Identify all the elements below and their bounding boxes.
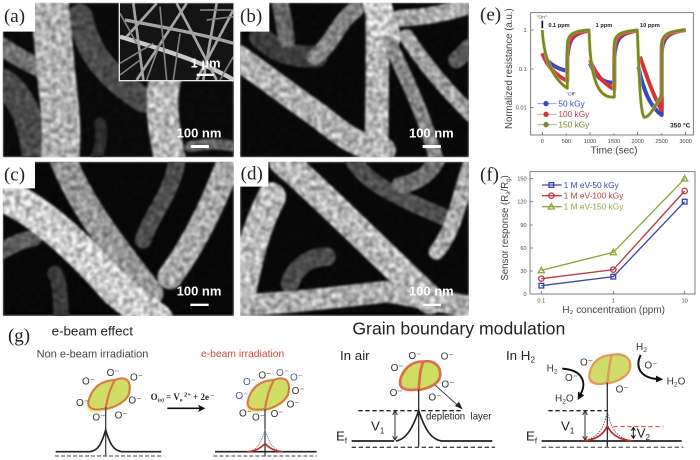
y axis title (e): Normalized resistance (a.u.)	[504, 8, 515, 129]
diagram: in H2: 2	[530, 356, 535, 365]
y axis title (f): Sensor response (R	[500, 195, 511, 281]
diagram: in H2: O	[678, 376, 686, 387]
label (b): (b)	[240, 6, 262, 27]
grain diagram: non irradiated: O⁻	[115, 411, 128, 422]
SEM fibres (b)	[237, 3, 472, 160]
x axis tick labels (e): 3000	[679, 139, 692, 145]
x tick labels (f): 10	[682, 299, 688, 305]
diagram: in air: O⁻	[391, 363, 404, 374]
legend (f): 1 M eV-150 kGy	[564, 201, 624, 211]
diagram: in air: O⁻	[441, 352, 454, 363]
x tick labels (f): 0.1	[537, 299, 545, 305]
x axis title (e): Time (sec)	[591, 145, 637, 156]
heading: grain boundary modulation: Grain boundary modulation	[352, 318, 565, 338]
diagram: in air: depletion layer	[426, 411, 492, 422]
diagram: in air: 1	[380, 426, 385, 435]
legend (e): 150 kGy	[558, 120, 590, 130]
diagram: in H2: H	[555, 394, 562, 405]
diagram: in H2: H	[667, 376, 674, 387]
SEM fibres (d)	[240, 160, 470, 316]
chart (f): sensor response vs H2 concentration	[480, 165, 695, 316]
grain diagram: irradiated: O⁻	[287, 400, 300, 411]
y tick labels (f): 90	[520, 223, 527, 229]
diagram: in H2: H	[547, 364, 554, 375]
y tick labels (f): 60	[520, 246, 527, 252]
grain diagram: irradiated: O⁻	[292, 386, 305, 397]
x axis tick labels (e): 2000	[631, 139, 644, 145]
annotations (e): "On"	[537, 14, 547, 20]
diagram: in H2: O⁻	[565, 373, 578, 384]
y axis title (f): )	[500, 175, 511, 178]
equation and arrow: 2+	[183, 392, 191, 399]
legend (e): 100 kGy	[558, 109, 590, 119]
diagram: in H2: E	[526, 429, 535, 444]
scale label 100 nm (c): 100 nm	[177, 284, 221, 299]
x axis tick labels (e): 1000	[584, 139, 596, 145]
diagram: in air: V	[371, 419, 380, 434]
x axis tick labels (e): 0	[541, 139, 544, 145]
grain diagram: irradiated: O⁻	[235, 391, 248, 402]
diagram: in air: f	[345, 436, 348, 445]
diagram: in H2: 2	[643, 347, 647, 354]
panel (b): SEM image	[237, 3, 472, 160]
label (f): (f)	[480, 165, 499, 186]
grain diagram: irradiated: O⁻	[239, 408, 252, 419]
annotations (e): 0.1 ppm	[548, 23, 570, 29]
grain diagram: non irradiated: O⁻	[92, 412, 105, 423]
y tick labels (f): 150	[517, 177, 527, 183]
y tick labels (f): 30	[520, 269, 527, 275]
equation and arrow: + 2e	[191, 392, 209, 402]
annotations (e): 350 °C	[670, 122, 691, 130]
heading: e-beam effect: e-beam effect	[52, 324, 133, 339]
annotations (e)	[537, 14, 691, 130]
diagram: in air: O⁻	[428, 393, 441, 404]
y axis tick labels (e)	[516, 28, 527, 112]
legend (e): 50 kGy	[558, 99, 586, 109]
annotations (e): 1 ppm	[596, 23, 612, 29]
diagram: in H2: 2	[646, 433, 651, 442]
grain diagram: non irradiated: O⁻	[130, 373, 143, 384]
legend (f): 1 M eV-100 kGy	[564, 190, 624, 200]
legend (f)	[542, 180, 624, 211]
y tick labels (f): 120	[517, 200, 527, 206]
grain diagram: non irradiated: O⁻	[107, 368, 120, 379]
scale label 100 nm (b): 100 nm	[409, 126, 454, 141]
label (g): (g)	[8, 325, 30, 346]
grain diagram: irradiated: O⁻	[258, 371, 271, 382]
grain diagram: non irradiated: O⁻	[128, 395, 141, 406]
scale label 100 nm (b)	[409, 126, 454, 148]
equation and arrow	[151, 392, 215, 412]
diagram: in H2: O⁻	[644, 360, 657, 371]
series lines and markers (f)	[538, 176, 688, 288]
scale label 100 nm (a): 100 nm	[177, 126, 221, 141]
diagram: in H2: 2	[562, 399, 566, 406]
grain diagram: irradiated: O⁻	[290, 373, 303, 384]
chart (e): normalized resistance vs time	[480, 5, 693, 156]
grain diagram: irradiated	[213, 368, 317, 457]
diagram: in air: O⁻	[408, 351, 421, 362]
panel (g): e-beam effect	[8, 324, 317, 457]
label (a): (a)	[4, 6, 25, 27]
diagram: in H2: 1	[570, 426, 575, 435]
x tick labels (f)	[537, 299, 688, 305]
diagram: in air: E	[336, 429, 345, 444]
diagram: in air: In air	[340, 348, 370, 363]
diagram: in air	[336, 348, 495, 447]
inset micrograph	[119, 3, 234, 81]
y axis tick labels (e): 0.1	[519, 67, 527, 73]
grain diagram: non irradiated	[55, 368, 163, 457]
diagram: in H2: 2	[674, 381, 678, 388]
diagram: in H2: O⁻	[580, 358, 593, 369]
legend (e)	[537, 99, 590, 130]
x axis tick labels (e)	[541, 139, 692, 145]
scale label 100 nm (d)	[409, 284, 454, 306]
panel (g): grain boundary modulation	[336, 318, 686, 447]
y axis tick labels (e): 0.01	[516, 106, 527, 112]
label (c): (c)	[4, 165, 25, 186]
grain diagram: irradiated: O⁻	[252, 412, 265, 423]
y tick labels (f): 0	[524, 292, 527, 298]
diagram: in air: O⁻	[441, 380, 454, 391]
annotations (e): 10 ppm	[640, 23, 660, 29]
x axis tick labels (e): 1500	[608, 139, 620, 145]
diagram: in H2: H	[636, 342, 643, 353]
axes (e)	[531, 13, 693, 135]
equation and arrow: = V	[164, 392, 180, 402]
diagram: in H2: V	[637, 425, 646, 440]
diagram: in H2: O⁻	[616, 385, 629, 396]
axes (f)	[530, 172, 695, 294]
label (e): (e)	[480, 5, 501, 26]
y tick labels (f)	[517, 177, 527, 298]
diagram: in H2: V	[561, 419, 570, 434]
x tick labels (f): 1	[612, 299, 615, 305]
panel (c): SEM image	[0, 160, 234, 320]
annotations (e): "Off"	[566, 91, 576, 97]
scale label 1 µm: 1 µm	[191, 56, 221, 71]
panel (a): SEM image with inset	[2, 3, 237, 160]
y axis title (f): g	[506, 178, 512, 182]
grain diagram: non irradiated: O⁻	[76, 398, 89, 409]
grain diagram: irradiated: O⁻	[276, 368, 289, 379]
SEM fibres (c)	[0, 160, 234, 320]
x axis tick labels (e): 2500	[655, 139, 668, 145]
equation and arrow: o	[180, 397, 183, 403]
label (d): (d)	[241, 163, 263, 184]
diagram: in H2: In H	[506, 348, 530, 363]
text: e-beam irradiation: e-beam irradiation	[201, 349, 284, 360]
panel (d): SEM image	[240, 160, 470, 316]
diagram: in H2	[506, 342, 686, 447]
diagram: in H2: f	[535, 436, 538, 445]
SEM fibres (a)	[2, 3, 237, 160]
grain diagram: non irradiated: O⁻	[82, 377, 95, 388]
scale label 100 nm (a)	[177, 126, 221, 148]
diagram: in H2: O	[566, 394, 574, 405]
scale label 100 nm (c)	[177, 284, 221, 306]
legend (f): 1 M eV-50 kGy	[564, 180, 620, 190]
y axis title (f): /R	[500, 182, 511, 191]
diagram: in air: O⁻	[390, 388, 403, 399]
x axis tick labels (e): 500	[562, 139, 571, 145]
equation and arrow: O	[151, 392, 158, 402]
scale label 100 nm (d): 100 nm	[409, 284, 454, 299]
grain diagram: irradiated: O⁻	[271, 409, 284, 420]
data curves (e)	[542, 30, 686, 117]
grain diagram: irradiated: O⁻	[243, 377, 256, 388]
x axis title (f): H₂ concentration (ppm)	[562, 305, 665, 316]
text: non e-beam irradiation: Non e-beam irradiation	[37, 348, 148, 360]
diagram: in H2: 2	[554, 369, 558, 376]
y axis tick labels (e): 1	[524, 28, 527, 34]
equation and arrow: −	[209, 392, 215, 399]
y axis title (f): a	[506, 191, 512, 195]
equation and arrow: (o)	[158, 396, 164, 403]
